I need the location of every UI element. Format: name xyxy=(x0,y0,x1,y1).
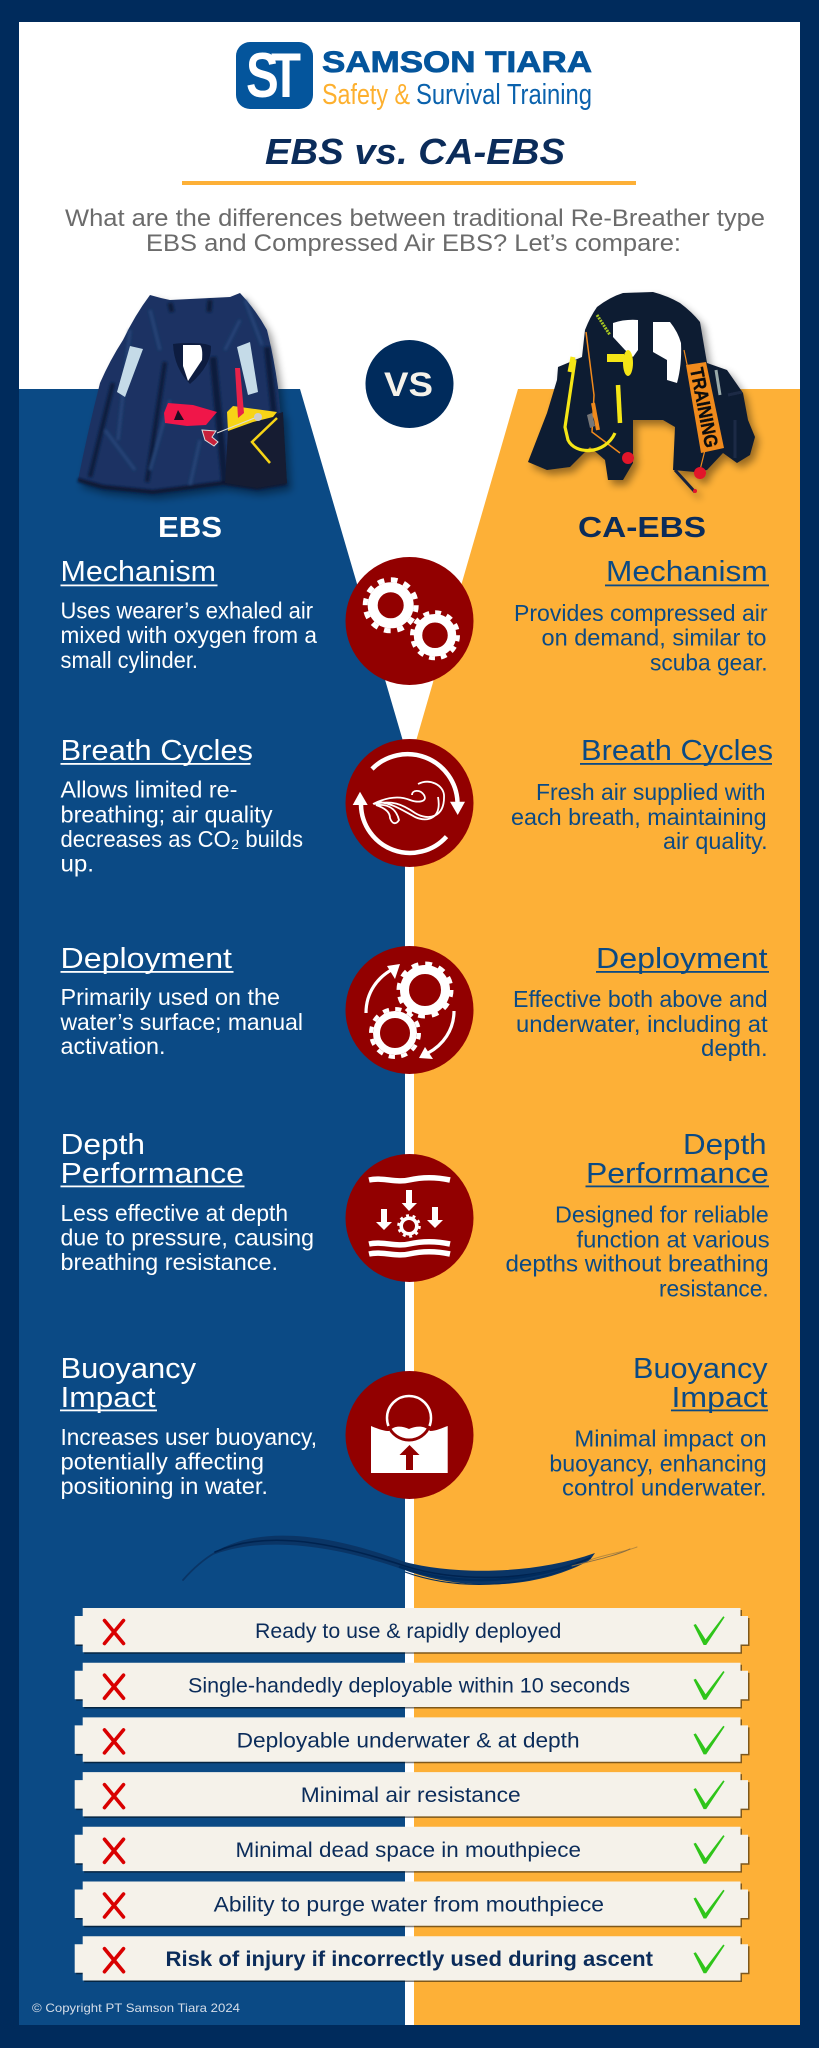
left: breath cycles xyxy=(60,735,303,876)
intro text: What are the differences between traditional Re-Breather type xyxy=(65,205,765,232)
photo: EBS vest xyxy=(78,293,287,492)
row 6 xyxy=(75,1882,749,1927)
right: mechanism: Mechanism xyxy=(606,556,768,588)
right: breath cycles: each breath, maintaining xyxy=(511,804,767,830)
heading: CA-EBS: CA-EBS xyxy=(578,512,706,544)
icon: depth pressure xyxy=(346,1154,474,1282)
left: depth performance xyxy=(60,1129,314,1275)
right: buoyancy impact: buoyancy, enhancing xyxy=(549,1451,767,1477)
left: depth performance: Less effective at depth xyxy=(60,1200,288,1226)
left: depth performance: Performance xyxy=(60,1158,244,1190)
right: depth performance: Depth xyxy=(683,1129,767,1161)
right: buoyancy impact: control underwater. xyxy=(562,1475,767,1501)
vs badge: VS xyxy=(384,366,433,404)
right: depth performance: function at various xyxy=(576,1226,770,1252)
left: mechanism: mixed with oxygen from a xyxy=(60,622,317,648)
right: buoyancy impact: Minimal impact on xyxy=(574,1426,767,1452)
row 2: Single-handedly deployable within 10 seconds xyxy=(188,1675,630,1698)
right: buoyancy impact xyxy=(549,1353,768,1501)
left: deployment: Primarily used on the xyxy=(60,984,280,1010)
right: buoyancy impact: Buoyancy xyxy=(633,1353,768,1385)
left: mechanism xyxy=(60,556,317,673)
left: depth performance: Depth xyxy=(60,1129,145,1161)
right: deployment: underwater, including at xyxy=(516,1011,768,1037)
right: breath cycles xyxy=(511,735,773,854)
left: breath cycles: Allows limited re- xyxy=(60,776,238,802)
left: breath cycles: Breath Cycles xyxy=(60,735,253,767)
title underline xyxy=(182,181,636,185)
right: mechanism: scuba gear. xyxy=(650,650,768,676)
left: buoyancy impact: Impact xyxy=(60,1382,156,1414)
right: buoyancy impact: Impact xyxy=(672,1382,768,1414)
left: deployment: activation. xyxy=(60,1033,166,1059)
right: depth performance: depths without breathing xyxy=(506,1251,769,1277)
row 7: Risk of injury if incorrectly used during ascent xyxy=(166,1948,653,1971)
right: breath cycles: Fresh air supplied with xyxy=(536,779,766,805)
left: deployment: water’s surface; manual xyxy=(60,1009,303,1035)
row 5 xyxy=(75,1827,749,1873)
title: EBS vs. CA-EBS xyxy=(265,131,565,172)
icon: mechanism gears xyxy=(346,557,474,685)
row 4 xyxy=(75,1772,749,1818)
right: depth performance xyxy=(506,1129,770,1302)
logo: SAMSON TIARA xyxy=(322,46,592,79)
logo xyxy=(236,40,592,111)
left: depth performance: breathing resistance. xyxy=(60,1249,278,1275)
left: buoyancy impact xyxy=(60,1353,317,1499)
left: breath cycles: breathing; air quality xyxy=(60,802,273,828)
right: breath cycles: air quality. xyxy=(663,828,768,854)
logo: Safety & xyxy=(322,79,410,111)
row 1: Ready to use & rapidly deployed xyxy=(255,1620,561,1643)
intro text: EBS and Compressed Air EBS? Let’s compare: xyxy=(146,230,681,257)
right: deployment: Effective both above and xyxy=(513,986,768,1012)
right: deployment: depth. xyxy=(701,1035,768,1061)
icon: buoyancy xyxy=(346,1371,474,1499)
panel: CA-EBS orange side xyxy=(414,389,800,2025)
intro text xyxy=(65,205,765,257)
right: deployment: Deployment xyxy=(596,943,768,975)
row 3: Deployable underwater & at depth xyxy=(237,1729,580,1752)
row 3 xyxy=(75,1717,749,1763)
left: buoyancy impact: potentially affecting xyxy=(60,1449,264,1475)
left: buoyancy impact: Increases user buoyancy, xyxy=(60,1424,317,1450)
left: breath cycles: decreases as CO₂ builds xyxy=(60,826,303,852)
row 1 xyxy=(75,1608,749,1654)
left: buoyancy impact: positioning in water. xyxy=(60,1473,268,1499)
copyright: © Copyright PT Samson Tiara 2024 xyxy=(32,2001,240,2015)
row 6: Ability to purge water from mouthpiece xyxy=(214,1894,604,1916)
icon: breath cycle xyxy=(346,739,474,867)
logo: Survival Training xyxy=(416,79,592,111)
logo: ST xyxy=(246,40,301,110)
icon: deployment gears xyxy=(346,946,474,1074)
left: mechanism: small cylinder. xyxy=(60,647,198,673)
right: deployment xyxy=(513,943,769,1061)
label text on vest: TRAINING xyxy=(685,366,721,449)
right: depth performance: Designed for reliable xyxy=(555,1202,769,1228)
left: deployment: Deployment xyxy=(60,943,232,975)
left: mechanism: Mechanism xyxy=(60,556,216,588)
right: breath cycles: Breath Cycles xyxy=(581,735,773,767)
brush stroke divider xyxy=(183,1536,637,1584)
right: depth performance: Performance xyxy=(586,1158,769,1190)
panel: EBS blue side xyxy=(19,389,405,2025)
right: depth performance: resistance. xyxy=(659,1276,769,1302)
left: breath cycles: up. xyxy=(60,850,94,876)
vs badge xyxy=(366,340,454,428)
row 7 xyxy=(75,1936,749,1982)
photo: CA-EBS vest xyxy=(528,292,755,493)
row 5: Minimal dead space in mouthpiece xyxy=(236,1839,581,1862)
right: mechanism: Provides compressed air xyxy=(514,600,768,626)
left: deployment xyxy=(60,943,303,1059)
left: mechanism: Uses wearer’s exhaled air xyxy=(60,598,313,624)
right: mechanism: on demand, similar to xyxy=(542,625,766,651)
left: depth performance: due to pressure, causing xyxy=(60,1225,314,1251)
heading: EBS: EBS xyxy=(158,512,222,544)
right: mechanism xyxy=(514,556,769,676)
row 2 xyxy=(75,1663,749,1708)
left: buoyancy impact: Buoyancy xyxy=(60,1353,197,1385)
row 4: Minimal air resistance xyxy=(301,1784,521,1807)
